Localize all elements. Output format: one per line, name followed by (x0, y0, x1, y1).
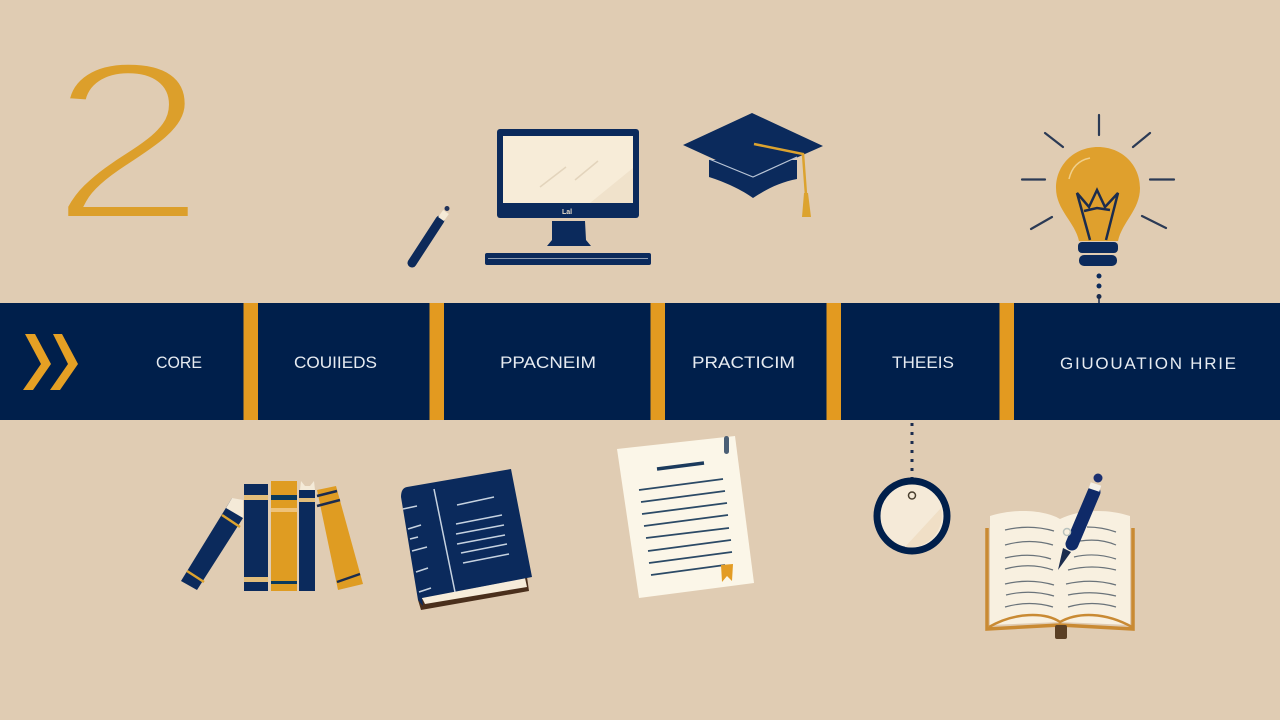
paper clip (724, 436, 729, 454)
timeline band (0, 303, 1280, 420)
large numeral 2: 2 (49, 15, 207, 269)
timeline labels: PPACNEIM (500, 353, 596, 372)
icon: pen (412, 206, 450, 263)
book clasp (1055, 625, 1067, 639)
icon: double chevron arrow (23, 334, 78, 390)
icon: hanging seal with dotted line (877, 423, 947, 551)
icon: desktop computer: Lal (562, 209, 572, 216)
icon: closed notebook (401, 469, 532, 610)
bookmark ribbon (721, 564, 733, 582)
timeline labels (156, 353, 1236, 373)
timeline labels: PRACTICIM (692, 353, 795, 372)
icon: open book with pen (987, 474, 1133, 639)
bulb rays (1022, 115, 1174, 229)
icon: desktop computer (485, 129, 651, 265)
bulb base (1078, 242, 1118, 253)
timeline labels: CORE (156, 353, 202, 372)
icon: document with ribbon (617, 436, 754, 598)
book cover outline (987, 528, 1133, 629)
book pages (990, 511, 1130, 625)
icon: graduation cap (683, 113, 823, 217)
timeline labels: GIUOUATION HRIE (1060, 354, 1236, 373)
bulb glass (1056, 147, 1140, 241)
icon: row of books (181, 481, 363, 591)
timeline labels: COUIIEDS (294, 353, 377, 372)
writing pen (1058, 474, 1102, 570)
icon: light bulb (1022, 115, 1174, 303)
timeline dividers (244, 303, 1014, 420)
timeline labels: THEEIS (892, 353, 954, 372)
